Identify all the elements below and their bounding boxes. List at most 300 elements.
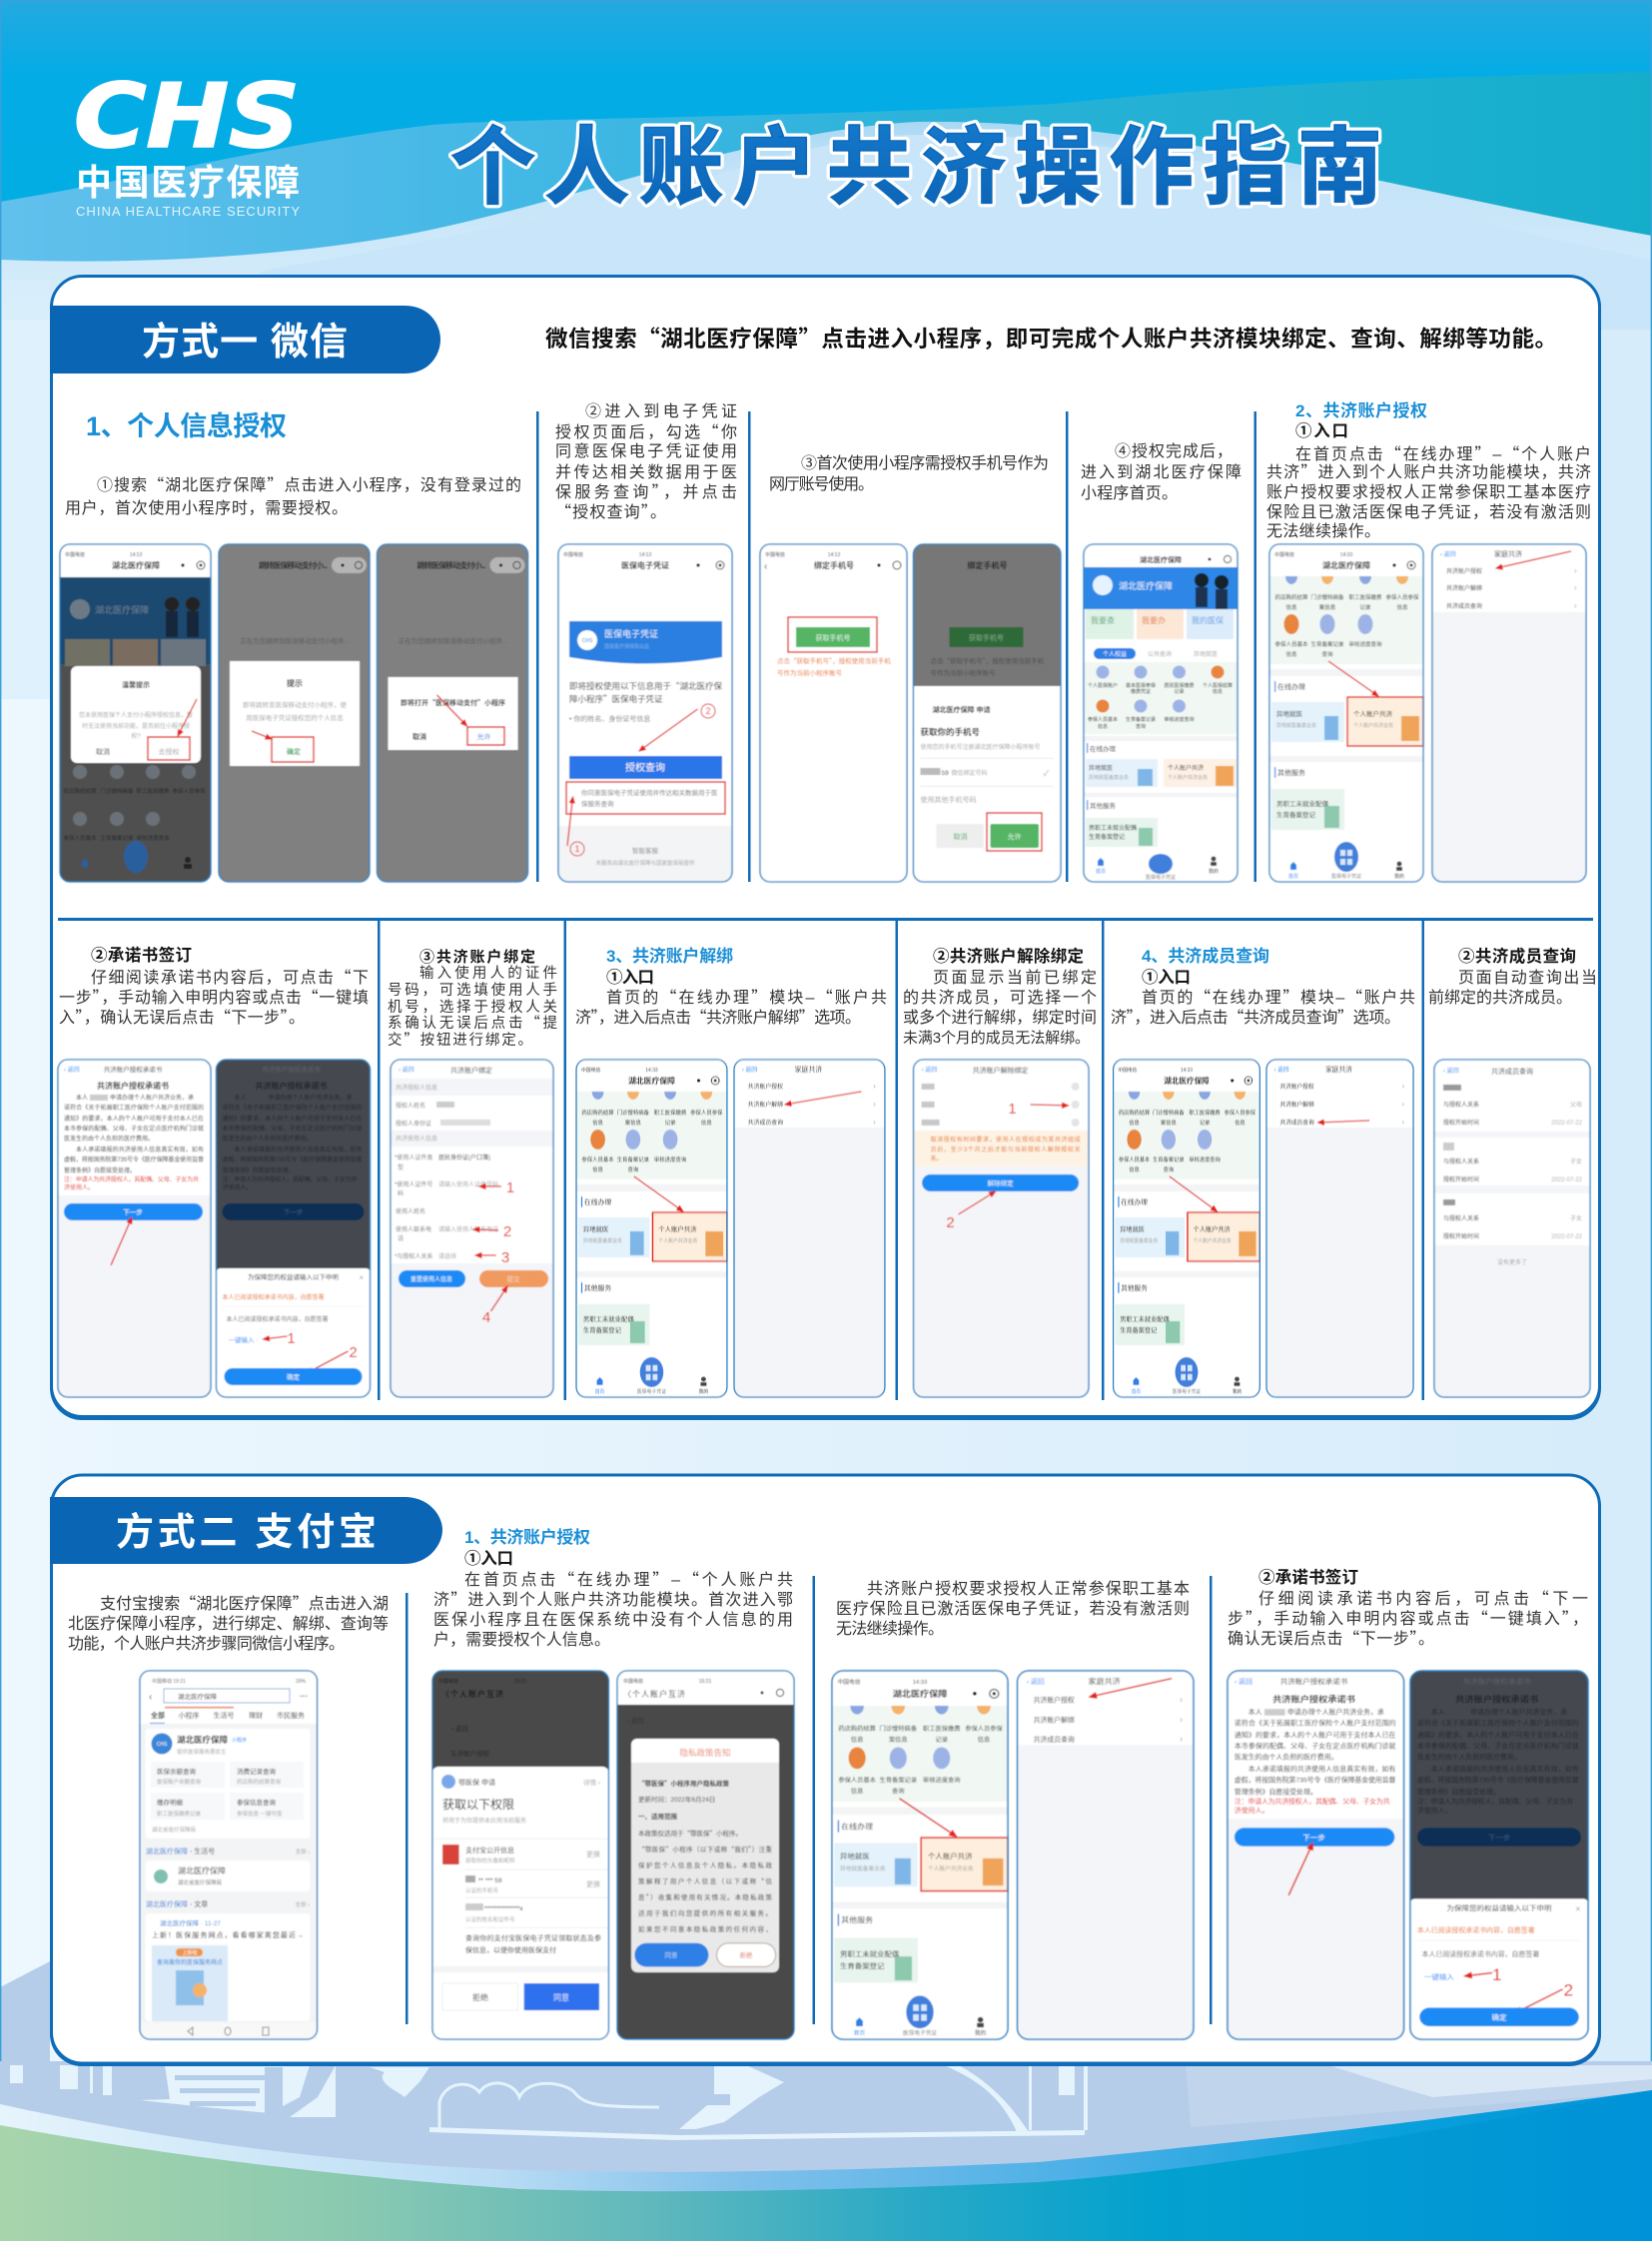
phone: online service entry: 参保人员基本: [1274, 640, 1308, 648]
phone: online service entry: 药店购药结算: [1274, 593, 1308, 601]
step text: Alipay intro: 功能，个人账户共济步骤同微信小程序。: [68, 1635, 345, 1653]
phone: Alipay search: 药店购药结算查询: [237, 1778, 282, 1786]
phone: Alipay home entry: [832, 1671, 1008, 2039]
phone: Alipay permission sheet: 更换: [586, 1879, 600, 1888]
phone: online service entry: 医保电子凭证: [1331, 873, 1361, 880]
phone: home entry for member query: 异地就医备案业务: [1120, 1237, 1158, 1244]
phone: home entry for unbinding: 我的: [699, 1388, 708, 1395]
phone: Alipay search: 医保余额查询: [157, 1767, 196, 1776]
phone: Alipay privacy notice: 拒绝: [739, 1950, 753, 1959]
phone: Alipay family sharing menu: 共济账户解绑: [1034, 1715, 1075, 1724]
phone: Alipay home entry: 参保人员参保: [965, 1725, 1003, 1733]
phone: Alipay search: 缴存明细: [157, 1798, 184, 1807]
phone: bind mobile number: 点击“获取手机号”，授权使用当前手机: [777, 655, 891, 665]
phone: open mini program dialog: 允许: [477, 732, 491, 741]
phone: Alipay search: 市民服务: [277, 1711, 305, 1720]
phone: mini program home: 个人账户共济: [1168, 764, 1204, 772]
phone: family sharing menu unbind: ›: [873, 1100, 876, 1109]
phone: home entry for member query: 信息: [1129, 1119, 1140, 1126]
phone: commitment letter: 本人承诺填报的共济使用人信息真实有效，如有: [76, 1145, 204, 1153]
phone: get phone number sheet: 获取你的手机号: [921, 727, 980, 737]
phone: Alipay commitment letter: 共济账户授权承诺书: [1272, 1694, 1355, 1705]
phone: Alipay permission sheet: 互济账户授权: [450, 1749, 489, 1758]
phone: Alipay commitment statement sheet: 本人已阅读授权承诺书内容，自愿签署: [1422, 1949, 1540, 1958]
phone: home entry for unbinding: 门诊慢特病备: [617, 1109, 650, 1117]
phone: Alipay search: 湖北医疗保障 - 生活号: [146, 1847, 215, 1856]
phone: commitment statement sheet: ×: [360, 1273, 364, 1282]
phone: member query results: ‹ 返回: [1443, 1068, 1459, 1075]
phone: Alipay search: 中国移动 19:21: [152, 1678, 186, 1685]
step text: shared account binding: 输入使用人的证件: [419, 965, 557, 982]
step text: member query entry: 济”，进入后点击“共济成员查询”选项。: [1111, 1004, 1400, 1028]
phone: home entry for member query: 在线办理: [1121, 1197, 1148, 1206]
phone: commitment statement sheet: 一键输入: [228, 1335, 255, 1344]
phone: family sharing menu authorize: 家庭共济: [1494, 549, 1522, 558]
step text: finished: 进入到湖北医疗保障: [1081, 463, 1241, 481]
phone: family sharing menu member query: 共济账户授权: [1279, 1083, 1314, 1091]
phone: mini program home: 其他服务: [1090, 801, 1117, 810]
step text: phone number: 网厅账号使用。: [769, 475, 874, 493]
phone: get phone number sheet: 使用其他手机号码: [921, 795, 977, 804]
phone: commitment letter: ‹ 返回: [64, 1067, 80, 1074]
phone: family sharing menu member query: ›: [1402, 1082, 1405, 1091]
phone: Alipay home entry: 生育备案记录: [880, 1777, 917, 1784]
phone: Alipay commitment statement sheet: 管理条例》自愿接受处理。: [1417, 1788, 1500, 1796]
phone: family sharing menu unbind: [734, 1060, 885, 1397]
phone: Alipay permission sheet: 获取你的头像和昵称: [465, 1857, 515, 1865]
phone: Alipay commitment letter: 通知》的要求，本人的个人账户可用于支付本人已在: [1235, 1731, 1396, 1740]
phone: Alipay privacy notice: 中国电信: [623, 1678, 643, 1685]
step text: unbinding: [903, 946, 1097, 1047]
phone: shared account binding form: 使用人联系电: [396, 1225, 431, 1233]
phone: family sharing menu unbind: 家庭共济: [795, 1065, 822, 1074]
step text: member query: 页面自动查询出当: [1458, 969, 1597, 987]
heading tab: 方式一 微信: 方式一 微信: [142, 322, 348, 364]
phone: member query results: 子女: [1570, 1214, 1582, 1222]
phone: home entry for unbinding: 异地就医备案业务: [583, 1237, 622, 1244]
phone: family sharing menu unbind: ‹ 返回: [742, 1067, 757, 1074]
phone: home entry for unbinding: 药店购药结算: [581, 1109, 614, 1117]
phone: Alipay search: 理财: [249, 1711, 263, 1720]
phone: electronic voucher authorization: 保服务查询: [581, 799, 614, 808]
step text: Alipay requirements: [836, 1580, 1190, 1638]
phone: home entry for member query: 湖北医疗保障: [1164, 1076, 1210, 1086]
phone: jump dialog confirm: 正在为您跳转到医保移动支付小程序...: [240, 636, 350, 645]
phone: Alipay home entry: 职工医保缴费: [923, 1725, 961, 1733]
phone: home entry for member query: 异地就医: [1120, 1224, 1146, 1233]
phone: online service entry: 其他服务: [1277, 768, 1305, 777]
phone: commitment statement sheet: 本市参保的配偶、父母、子女在定点医疗机构门诊就: [222, 1124, 362, 1132]
phone: unbind members: 员后，至少3个月之后才能与当前授权人解除授权关: [931, 1145, 1081, 1153]
phone: commitment letter: 下一步: [123, 1208, 143, 1216]
step text: finished: [1081, 442, 1241, 502]
panel: method two Alipay: [50, 1475, 1601, 2066]
phone: commitment letter: 共济账户授权承诺书: [104, 1065, 163, 1074]
step text: unbinding entry: [575, 946, 887, 1028]
phone: shared account binding form: 2: [503, 1223, 511, 1240]
step text: shared account authorization: [1266, 400, 1591, 540]
phone: Alipay permission sheet: ‹ 返回: [451, 1725, 468, 1733]
phone: member query results: 授权开始时间: [1443, 1119, 1479, 1126]
phone: Alipay search: 生活号: [214, 1711, 234, 1720]
phone: online service entry: 生育备案登记: [1276, 810, 1316, 819]
phone: Alipay search: CHS: [157, 1742, 168, 1748]
phone: commitment statement sheet: 本人承诺填报的共济使用人信息真实有效，如有: [234, 1145, 362, 1153]
phone: family sharing menu member query: 共济成员查询: [1279, 1119, 1314, 1126]
phone: Alipay search: 上新啦: [182, 1949, 198, 1956]
phone: member query results: 2022-07-22: [1551, 1234, 1583, 1240]
phone: home entry for member query: 中国电信: [1118, 1067, 1138, 1074]
phone: online service entry: 首页: [1288, 873, 1298, 880]
phone: Alipay family sharing menu: [1018, 1671, 1194, 2039]
phone: family sharing menu authorize: [1432, 544, 1586, 882]
heading tab: 方式二 支付宝: 方式二 支付宝: [116, 1512, 377, 1554]
phone: commitment letter: 虚假，将按国务院第735号令《医疗保障基金使用监督: [64, 1155, 204, 1163]
phone: get phone number sheet: 取消: [953, 832, 967, 841]
phone: home with authorize dialog: 药店购药结算: [63, 787, 97, 795]
phone: home with authorize dialog: 参保人员基本: [63, 834, 97, 842]
phone: online service entry: 门诊慢特病备: [1310, 593, 1344, 601]
step text: shared account authorization: 无法继续操作。: [1266, 522, 1380, 540]
phone: shared account binding form: *与授权人关系: [395, 1252, 432, 1260]
phone: home with authorize dialog: 温馨提示: [122, 680, 150, 689]
phone: home entry for member query: 门诊慢特病备: [1153, 1109, 1185, 1117]
phone: home with authorize dialog: 审核进度查询: [136, 834, 170, 842]
phone: shared account binding form: ‹ 返回: [399, 1067, 414, 1074]
step text: Alipay shared account authorization: 1、共济账户授权: [464, 1527, 590, 1547]
phone: commitment statement sheet: 2: [349, 1344, 358, 1361]
phone: home entry for member query: 14:33: [1181, 1068, 1193, 1074]
phone: commitment statement sheet: 下一步: [284, 1208, 304, 1216]
phone: home entry for member query: 首页: [1132, 1388, 1141, 1395]
step text: personal info authorization: [65, 411, 521, 517]
phone: commitment statement sheet: [216, 1060, 370, 1397]
phone: commitment statement sheet: 虚假，将按国务院第735号令《医疗保障基金使用监督: [222, 1155, 362, 1163]
step text: unbinding entry: 济”，进入后点击“共济账户解绑”选项。: [575, 1004, 861, 1028]
step text: member query entry: 4、共济成员查询: [1142, 946, 1269, 966]
phone: Alipay search: 医保账户余额查询: [157, 1778, 202, 1786]
phone: home entry for unbinding: 信息: [701, 1119, 712, 1126]
phone: unbind members: 2: [946, 1214, 955, 1231]
phone: mini program home: 记录: [1174, 688, 1185, 695]
phone: Alipay commitment statement sheet: 1: [1492, 1966, 1502, 1984]
phone: Alipay home entry: 异地就医: [840, 1852, 870, 1861]
phone: member query results: 与授权人关系: [1443, 1214, 1479, 1222]
phone: get phone number sheet: 微信绑定号码: [951, 769, 988, 777]
phone: online service entry: 在线办理: [1277, 682, 1305, 691]
phone: commitment statement sheet: 管理条例》自愿接受处理。: [222, 1166, 295, 1174]
phone: Alipay commitment letter: 本人: [1248, 1708, 1262, 1717]
phone: Alipay home entry: 生育备案登记: [840, 1961, 884, 1970]
step text: unbinding entry: 首页的“在线办理”模块–“账户共: [606, 984, 887, 1008]
phone: mini program home: 缴费凭证: [1131, 688, 1151, 695]
phone: family sharing menu authorize: 共济成员查询: [1446, 602, 1482, 610]
phone: shared account binding form: [391, 1060, 553, 1397]
phone: home entry for unbinding: 参保人员参保: [690, 1109, 723, 1117]
phone: jump dialog confirm: 用医保电子凭证授权您的个人信息: [246, 713, 344, 722]
phone: home entry for member query: 个人账户共济业务: [1194, 1237, 1232, 1244]
phone: mini program home: 个人医保结算: [1203, 682, 1233, 689]
phone: Alipay family sharing menu: 家庭共济: [1089, 1676, 1121, 1686]
phone: family sharing menu unbind: 共济账户解绑: [748, 1101, 783, 1109]
phone: shared account binding form: 共济账户绑定: [450, 1066, 492, 1075]
phone: electronic voucher authorization: [558, 544, 732, 882]
phone: electronic voucher authorization: 医保电子凭证: [604, 628, 658, 639]
step text: member query: [1428, 946, 1597, 1007]
step text: finished: ④授权完成后，: [1115, 442, 1233, 460]
phone: get phone number sheet: 湖北医疗保障 申请: [933, 705, 990, 714]
phone: jump dialog confirm: 即将跳转至医保移动支付小程序，使: [243, 700, 348, 709]
phone: mini program home: [1084, 544, 1238, 882]
phone: Alipay privacy notice: 保护您个人信息及个人隐私。本隐私政: [638, 1861, 773, 1869]
phone: shared account binding form: 请输入使用人证件号码: [438, 1180, 498, 1188]
phone: online service entry: 个人账户共济业务: [1353, 722, 1393, 729]
phone: Alipay search: 消费记录查询: [237, 1767, 276, 1776]
phone: Alipay permission sheet: **************x: [484, 1905, 523, 1912]
phone: member query results: 共济成员查询: [1491, 1067, 1533, 1076]
phone: Alipay home entry: 14:33: [913, 1680, 927, 1686]
phone: Alipay commitment letter: 诺符合《关于拓展职工医疗保险个人账户支付范围的: [1235, 1719, 1396, 1728]
phone: bind mobile number: 获取手机号: [815, 633, 851, 642]
phone: Alipay commitment statement sheet: 本人: [1431, 1708, 1445, 1717]
phone: electronic voucher authorization: 国家医疗保障局出品: [604, 643, 649, 650]
phone: Alipay commitment letter: 虚假，将按国务院第735号令《医疗保障基金使用监督: [1235, 1776, 1396, 1784]
phone: bind mobile number: 绑定手机号: [814, 560, 854, 570]
step text: shared account binding: 交”按钮进行绑定。: [388, 1029, 532, 1050]
phone: member query results: 与授权人关系: [1443, 1101, 1479, 1109]
phone: mini program home: 湖北医疗保障: [1119, 580, 1173, 591]
phone: Alipay search: [140, 1671, 318, 2039]
phone: home entry for unbinding: 异地就医: [583, 1224, 609, 1233]
phone: Alipay commitment statement sheet: 诺符合《关于拓展职工医疗保险个人账户支付范围的: [1417, 1719, 1579, 1728]
phone: Alipay privacy notice: 一、适用范围: [638, 1812, 677, 1821]
phone: family sharing menu member query: [1266, 1060, 1413, 1397]
phone: home entry for unbinding: 个人账户共济: [658, 1224, 697, 1233]
phone: mini program home: 个人权益: [1103, 650, 1127, 658]
phone: home with authorize dialog: 中国电信: [65, 551, 85, 558]
step text: personal info authorization: 用户，首次使用小程序时，需要授权。: [65, 499, 348, 517]
phone: mini program home: 首页: [1096, 868, 1106, 875]
phone: family sharing menu authorize: ›: [1574, 566, 1577, 575]
phone: mini program home: 个人账户共济业务: [1168, 774, 1208, 781]
phone: open mini program dialog: 正在为您跳转到医保移动支付小程序...: [399, 636, 507, 645]
phone: Alipay search: ‹: [149, 1692, 152, 1703]
phone: mini program home: 生育备案登记: [1089, 833, 1125, 841]
phone: bind mobile number: ‹: [764, 561, 767, 572]
phone: family sharing menu authorize: ‹ 返回: [1440, 551, 1456, 558]
step text: shared account binding: ③共济账户绑定: [419, 948, 535, 966]
phone: Alipay commitment letter: 管理条例》自愿接受处理。: [1235, 1788, 1317, 1796]
phone: commitment statement sheet: 为保障您的权益请输入以下申明: [248, 1272, 340, 1281]
step text: unbinding: 的共济成员，可选择一个: [903, 989, 1097, 1007]
phone: open mini program dialog: 取消: [413, 732, 426, 741]
phone: home entry for member query: 个人账户共济: [1194, 1224, 1231, 1233]
phone: electronic voucher authorization: 授权查询: [625, 761, 665, 774]
phone: shared account binding form: 居民身份证(户口簿): [438, 1153, 490, 1161]
phone: commitment letter: 管理条例》自愿接受处理。: [64, 1166, 136, 1174]
step text: Alipay intro: [68, 1590, 389, 1653]
phone: home entry for unbinding: 其他服务: [584, 1283, 611, 1292]
phone: Alipay commitment statement sheet: 一键输入: [1424, 1972, 1455, 1981]
phone: bind mobile number: [760, 544, 907, 882]
phone: online service entry: 审核进度查询: [1348, 640, 1382, 648]
phone: family sharing menu authorize: ›: [1574, 601, 1577, 610]
step text: shared account authorization: 在首页点击“在线办理”–“个人账户: [1295, 440, 1591, 464]
phone: home entry for member query: 记录: [1200, 1119, 1211, 1126]
phone: shared account binding form: 使用人姓名: [396, 1207, 425, 1215]
phone: family sharing menu unbind: ›: [873, 1082, 876, 1091]
phone: Alipay commitment statement sheet: 下一步: [1488, 1833, 1510, 1842]
step text: Alipay shared account authorization: 户，需要授权个人信息。: [433, 1631, 610, 1649]
phone: home entry for member query: 审核进度查询: [1189, 1155, 1221, 1163]
step text: unbinding entry: ①入口: [606, 968, 654, 987]
phone: Alipay search: 湖北省医疗保障局: [152, 1826, 196, 1834]
phone: bind mobile number: 14:13: [828, 552, 840, 558]
phone: Alipay commitment statement sheet: 医发生的由个人负担的医疗费用。: [1417, 1753, 1521, 1761]
phone: Alipay search: 湖北医疗保障 · 11-27: [160, 1918, 221, 1927]
phone: shared account binding form: 码: [398, 1189, 404, 1197]
phone: get phone number sheet: ✓: [1043, 769, 1049, 778]
phone: commitment letter: 共济账户授权承诺书: [97, 1081, 169, 1091]
phone: open mini program dialog: 即将打开“医保移动支付”小程序: [401, 698, 505, 708]
step text: Alipay commitment: 确认无误后点击“下一步”。: [1228, 1625, 1434, 1649]
phone: Alipay home entry: 个人账户共济业务: [928, 1865, 974, 1872]
phone: Alipay permission sheet: 认证的手机号: [465, 1886, 499, 1894]
phone: Alipay commitment letter: [1228, 1671, 1404, 2039]
phone: Alipay commitment letter: 注：申请人为共济授权人，其配偶、父母、子女为共: [1235, 1797, 1390, 1806]
phone: Alipay home entry: 湖北医疗保障: [893, 1688, 947, 1699]
phone: Alipay permission sheet: 获取以下权限: [442, 1798, 514, 1812]
phone: electronic voucher authorization: 即将授权使用以下信息用于“湖北医疗保: [569, 680, 722, 692]
step text: finished: 小程序首页。: [1081, 484, 1178, 502]
phone: Alipay privacy notice: 适用于我们向您提供的所有相关服务。: [638, 1908, 772, 1917]
phone: shared account binding form: 4: [482, 1309, 490, 1326]
phone: mini program home: 我要查: [1091, 615, 1115, 625]
phone: mini program home: 我的医保: [1192, 615, 1224, 625]
phone: get phone number sheet: 获取手机号: [969, 633, 1004, 642]
step text: Alipay shared account authorization: ①入口: [464, 1549, 513, 1568]
phone: Alipay permission sheet: 中国电信: [438, 1678, 458, 1685]
phone: member query results: 没有更多了: [1497, 1258, 1527, 1266]
phone: home entry for member query: 我的: [1233, 1388, 1241, 1395]
step text: Alipay shared account authorization: [433, 1527, 793, 1649]
phone: member query results: [1434, 1060, 1590, 1397]
step text: Alipay commitment: 步”，手动输入申明内容或点击“一键填入”，: [1228, 1605, 1588, 1629]
phone: commitment letter: 本市参保的配偶、父母、子女在定点医疗机构门诊就: [64, 1124, 204, 1132]
phone: electronic voucher authorization: 本服务由湖北医疗保障与国家医保局提供: [595, 859, 695, 867]
step text: Alipay shared account authorization: 医保小程序且在医保系统中没有个人信息的用: [433, 1611, 793, 1629]
phone: commitment statement sheet: 1: [287, 1330, 296, 1347]
dividers: [58, 411, 1593, 1400]
step text: electronic voucher: ②进入到电子凭证: [585, 402, 737, 420]
phone: commitment statement sheet: 通知》的要求，本人的个人账户可用于支付本人已在: [222, 1115, 362, 1122]
phone: Alipay commitment statement sheet: 共济账户授权承诺书: [1455, 1694, 1538, 1705]
phone: unbind members: 取消授权有时间要求，使用人在授权成为某共济组成: [931, 1135, 1081, 1143]
phone: family sharing menu member query: ‹ 返回: [1274, 1067, 1289, 1074]
phone: family sharing menu authorize: ›: [1574, 583, 1577, 592]
phone: electronic voucher authorization: 1: [574, 844, 580, 854]
phone: home entry for unbinding: 信息: [592, 1119, 603, 1126]
step text: commitment signing: 一步”，手动输入申明内容或点击“一键填: [59, 984, 369, 1008]
phone: Alipay search: 上新！医保服务网点，看看哪家离您最近→: [152, 1930, 304, 1939]
phone: home entry for member query: 案信息: [1161, 1119, 1177, 1126]
phone: electronic voucher authorization: 医保电子凭证: [621, 560, 669, 570]
phone: Alipay search: 全部: [151, 1711, 165, 1720]
phone: family sharing menu unbind: ›: [873, 1118, 876, 1126]
phone: commitment statement sheet: 济使用人。: [222, 1183, 253, 1191]
phone: Alipay privacy notice: [617, 1671, 794, 2039]
phone: jump dialog confirm: 跳转医保移动支付小...: [259, 560, 328, 570]
phone: member query results: 授权开始时间: [1443, 1175, 1479, 1183]
phone: home entry for unbinding: 审核进度查询: [654, 1155, 687, 1163]
phone: Alipay search: 查询离你的医保服务网点: [157, 1958, 223, 1966]
phone: Alipay commitment statement sheet: 本人已阅读授权承诺书内容，自愿签署: [1417, 1925, 1535, 1934]
step text: personal info authorization: 1、个人信息授权: [86, 411, 287, 441]
phone: family sharing menu member query: 共济账户解绑: [1279, 1101, 1314, 1109]
phone: shared account binding form: 请输入使用人联系电话: [438, 1225, 498, 1233]
phone: home entry for unbinding: 生育备案登记: [583, 1325, 622, 1334]
phone: home entry for unbinding: 记录: [665, 1119, 676, 1126]
phone: Alipay permission sheet: 将用于为你提供本应用当前服务: [442, 1817, 526, 1825]
phone: family sharing menu unbind: 共济账户授权: [748, 1083, 783, 1091]
phone: Alipay family sharing menu: 共济账户授权: [1034, 1696, 1075, 1705]
phone: Alipay permission sheet: 认证的姓名和证件号: [465, 1915, 515, 1923]
phone: commitment statement sheet: 确定: [287, 1372, 300, 1381]
phone: online service entry: 个人账户共济: [1353, 709, 1392, 718]
phone: Alipay commitment letter: 医发生的由个人负担的医疗费用。: [1235, 1753, 1338, 1761]
phone: Alipay home entry: 信息: [851, 1736, 863, 1744]
phone: commitment letter: 通知》的要求，本人的个人账户可用于支付本人已在: [64, 1115, 204, 1122]
phone: Alipay commitment statement sheet: 注：申请人为共济授权人，其配偶、父母、子女为共: [1417, 1797, 1573, 1806]
phone: Alipay search: ···: [300, 1692, 308, 1701]
logo: China Healthcare Security: 中国医疗保障: [76, 162, 300, 203]
step text: commitment signing: 仔细阅读承诺书内容后，可点击“下: [91, 964, 369, 988]
phone: online service entry: 信息: [1285, 650, 1297, 658]
phone: mini program home: 居民医保缴费: [1164, 682, 1195, 689]
phone: Alipay commitment statement sheet: 通知》的要求，本人的个人账户可用于支付本人已在: [1417, 1731, 1579, 1740]
phone: Alipay home entry: 药店购药结算: [838, 1725, 876, 1733]
phone: Alipay search: 提供医保服务惠民生: [177, 1748, 227, 1756]
phone: home entry for unbinding: 生育备案记录: [617, 1155, 650, 1163]
phone: Alipay home entry: 异地就医备案业务: [840, 1865, 886, 1872]
phone: mini program home: 审核进度查询: [1164, 716, 1195, 723]
phone: Alipay home entry: 医保电子凭证: [903, 2029, 938, 2037]
phone: electronic voucher authorization: 你同意医保电子凭证使用并传达相关数据用于医: [581, 788, 718, 797]
phone: home with authorize dialog: 您未使用医保个人支付小程序授权信息，暂: [79, 711, 193, 719]
phone: shared account binding form: 共济使用人信息: [396, 1134, 437, 1142]
phone: bind mobile number: 中国电信: [765, 551, 785, 558]
phone: Alipay search: 湖北医疗保障: [178, 1866, 226, 1875]
phone: home entry for unbinding: 首页: [595, 1388, 604, 1395]
phone: Alipay family sharing menu: ›: [1180, 1695, 1183, 1705]
phone: mini program home: 信息: [1213, 688, 1223, 695]
phone: unbind members: 系。: [931, 1154, 943, 1162]
phone: home entry for member query: 职工医保缴费: [1189, 1109, 1221, 1117]
phone: home entry for unbinding: 医保电子凭证: [637, 1388, 666, 1395]
phone: Alipay family sharing menu: ›: [1180, 1715, 1183, 1724]
phone: open mini program dialog: [378, 544, 527, 882]
phone: Alipay search: 湖北医疗保障: [177, 1735, 229, 1745]
phone: Alipay permission sheet: 拒绝: [472, 1992, 488, 2002]
phone: open mini program dialog: 跳转医保移动支付小...: [417, 560, 485, 570]
step text: shared account authorization: 共济”进入到个人账户共济功能模块，共济: [1266, 458, 1591, 482]
phone: Alipay privacy notice: ‹ 返回: [627, 1717, 644, 1725]
phone: home with authorize dialog: [60, 544, 211, 882]
step text: unbinding: ②共济账户解除绑定: [933, 946, 1084, 966]
phone: online service entry: [1269, 544, 1423, 882]
phone: mini program home: 参保人员基本: [1088, 716, 1118, 723]
phone: commitment letter: 注：申请人为共济授权人，其配偶、父母、子女为共: [64, 1175, 199, 1183]
